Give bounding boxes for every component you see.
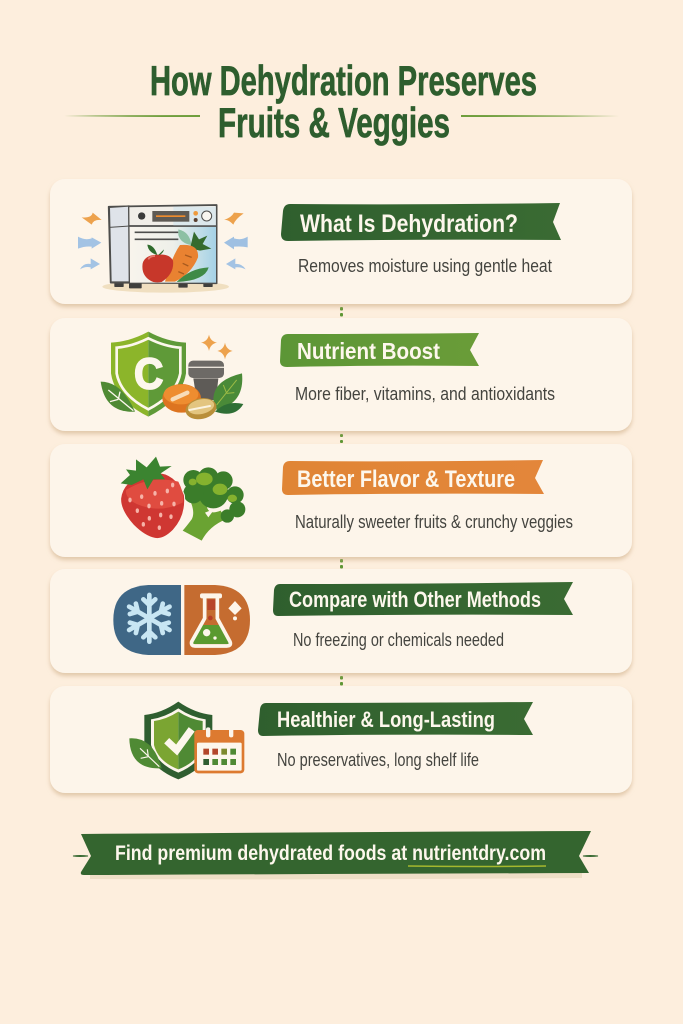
ribbon heading: [273, 582, 573, 616]
ribbon heading: [282, 460, 544, 495]
panel: healthier and long-lasting: [50, 686, 632, 793]
panel: what is dehydration: [50, 179, 632, 304]
title: Fruits & Veggies: [218, 99, 450, 146]
ribbon heading: [281, 203, 561, 241]
icon: snowflake and flask: [113, 585, 250, 655]
ribbon heading: Healthier & Long-Lasting: [277, 707, 495, 732]
panel: better flavor and texture: [50, 444, 632, 557]
title: [150, 57, 537, 146]
connector dots 3: [340, 559, 343, 568]
panel: compare with other methods: [50, 569, 632, 673]
ribbon heading: [280, 333, 479, 367]
ribbon heading: What Is Dehydration?: [300, 210, 518, 238]
footer banner: [73, 831, 598, 879]
description: Naturally sweeter fruits & crunchy veggies: [295, 512, 573, 532]
icon: dehydrator oven: [78, 205, 248, 293]
ribbon heading: [258, 702, 533, 736]
description: No preservatives, long shelf life: [277, 750, 479, 770]
description: More fiber, vitamins, and antioxidants: [295, 384, 555, 404]
ribbon heading: Better Flavor & Texture: [297, 466, 515, 493]
connector dots 2: [340, 434, 343, 443]
icon: vitamin shield: [101, 332, 243, 422]
panel: nutrient boost: [50, 318, 632, 431]
ribbon heading: Nutrient Boost: [297, 338, 440, 364]
title rule left: [64, 115, 200, 117]
footer banner: Find premium dehydrated foods at nutrientdry.com: [115, 842, 546, 865]
connector dots 1: [340, 307, 343, 316]
description: Removes moisture using gentle heat: [298, 256, 552, 276]
title rule right: [461, 115, 619, 117]
icon: shield, leaf and calendar: [129, 702, 244, 779]
icon: strawberry and broccoli: [121, 457, 245, 541]
description: No freezing or chemicals needed: [293, 630, 504, 650]
ribbon heading: Compare with Other Methods: [289, 587, 541, 612]
icon: vitamin shield: C: [134, 350, 163, 398]
connector dots 4: [340, 676, 343, 686]
